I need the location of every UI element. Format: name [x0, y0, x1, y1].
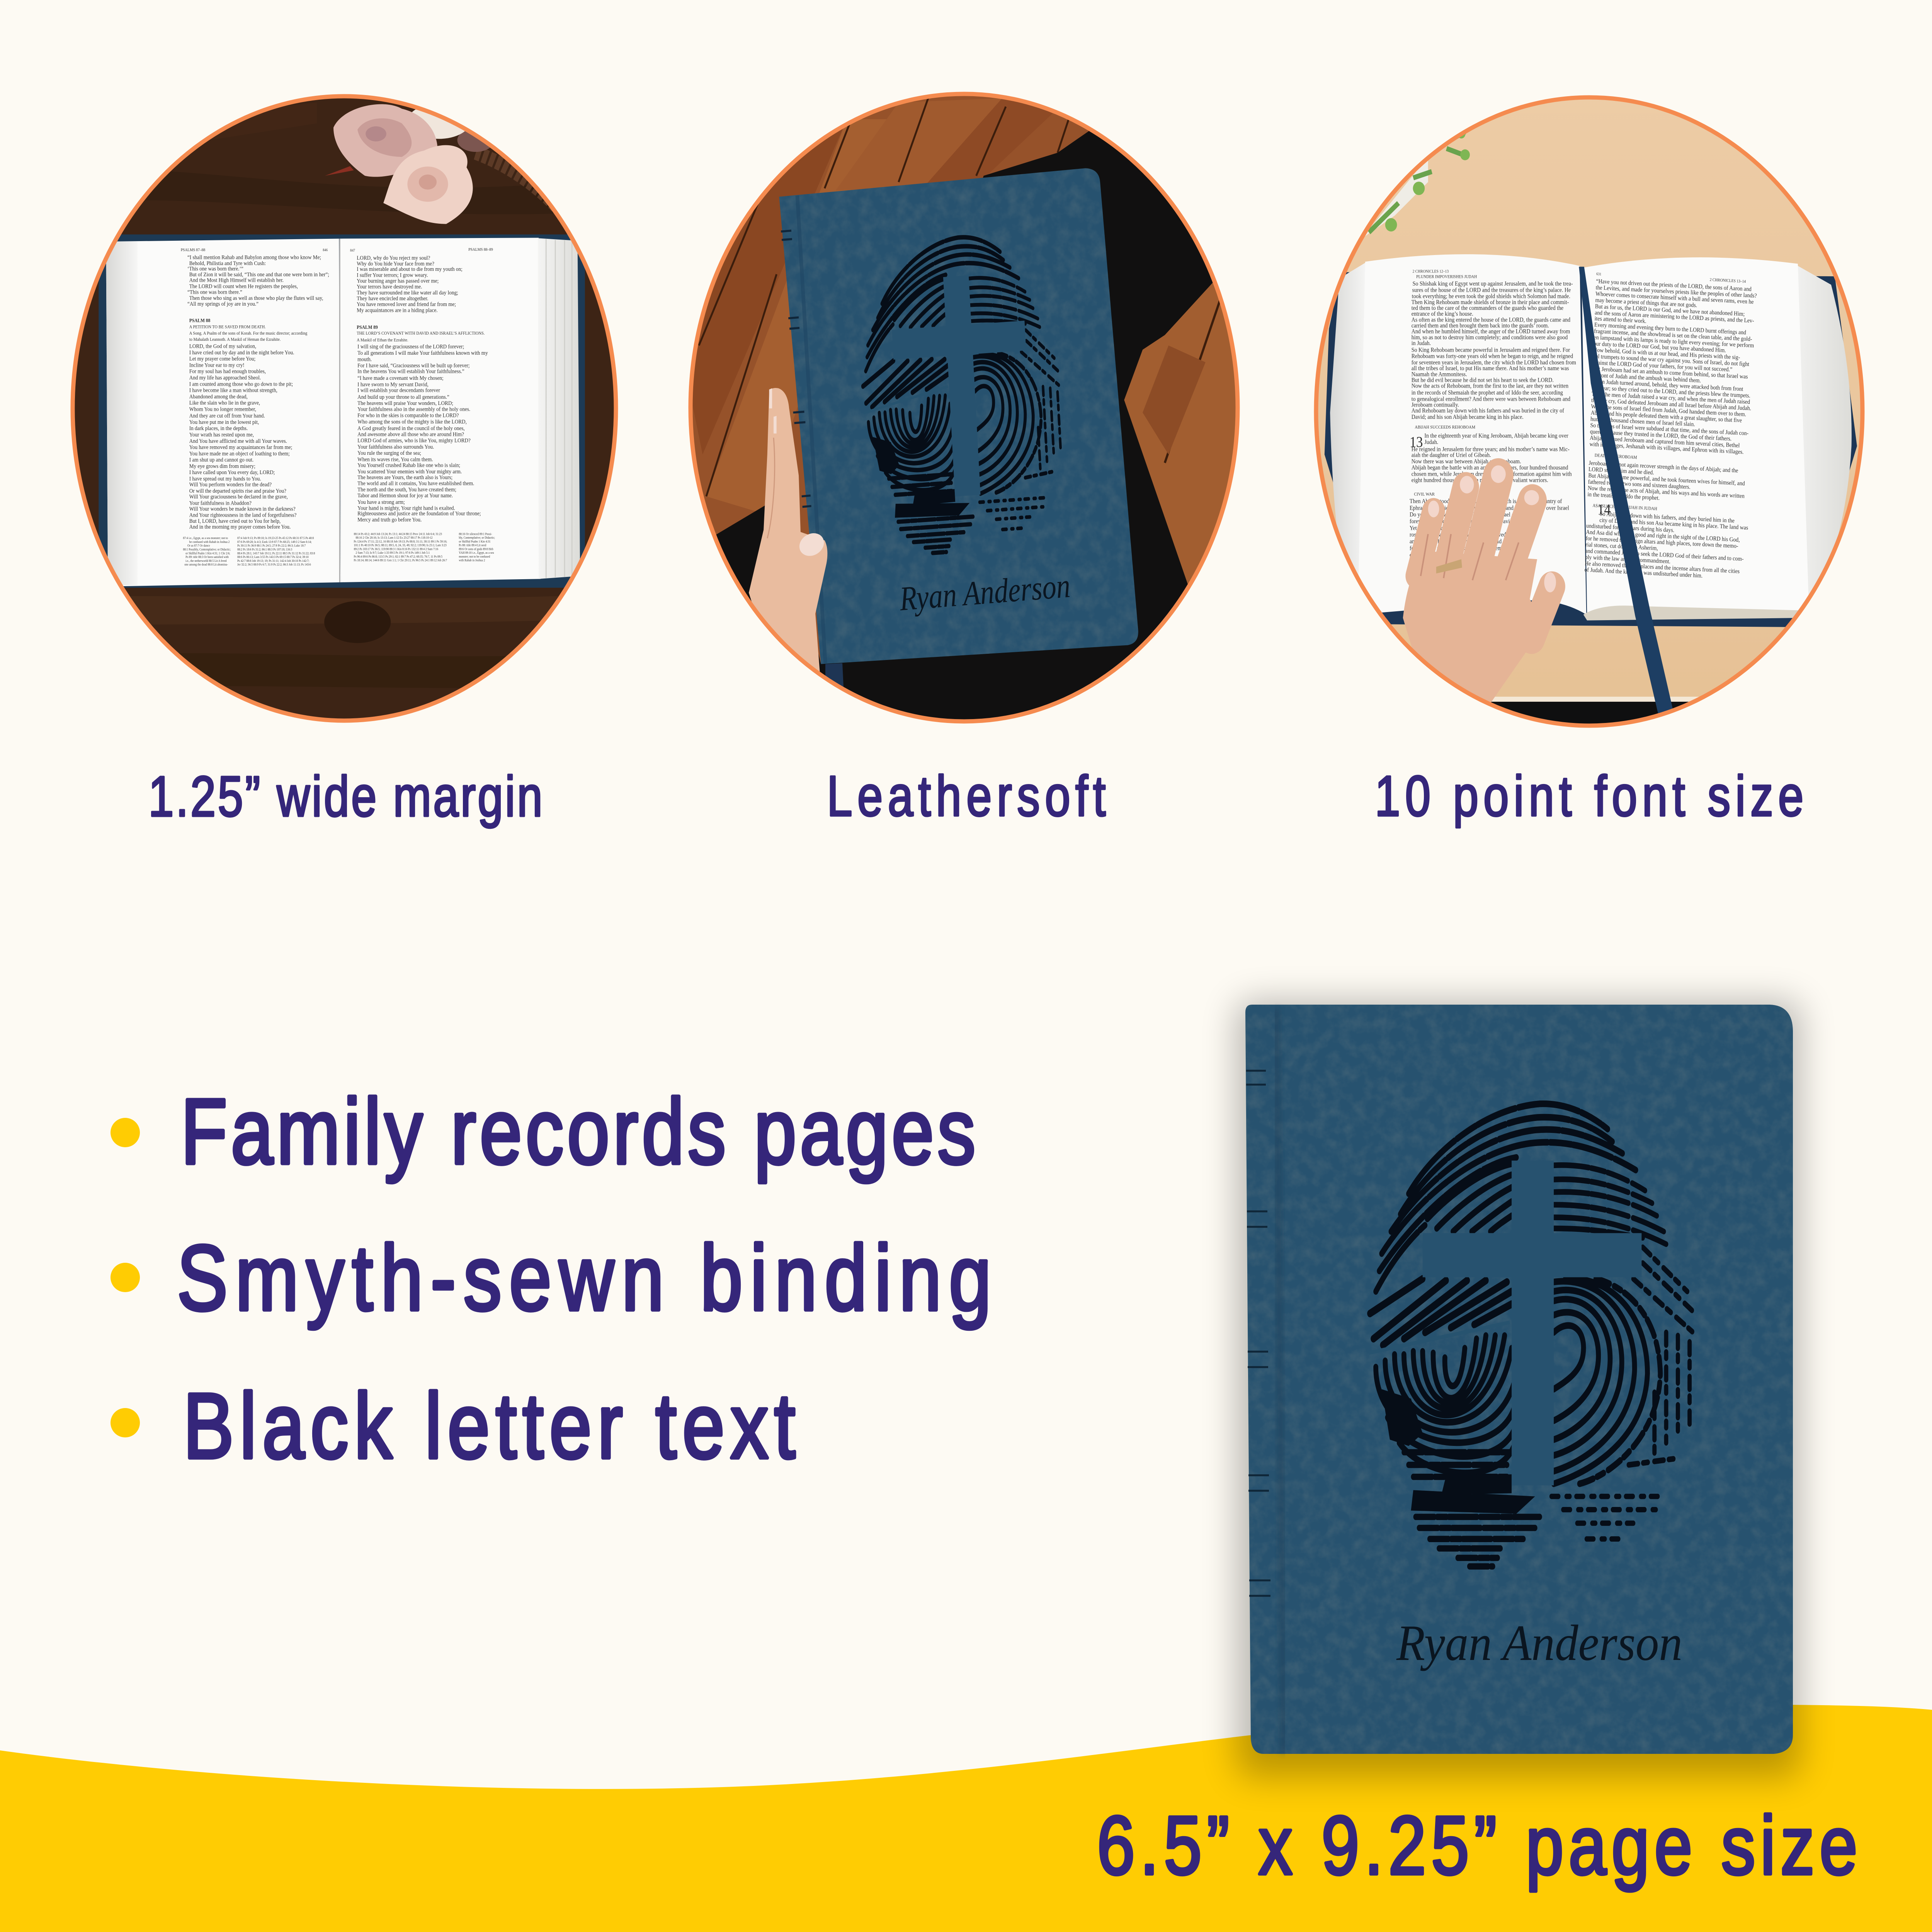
- right page text: rial stones, cut down the Asherim,: [1585, 541, 1658, 552]
- yellow wave band: [0, 1704, 1932, 1932]
- left page text: through the sons of David, and having with you: [1410, 558, 1513, 565]
- left page text: to genealogical enrollment? And there were wars between Rehoboam and: [1412, 396, 1571, 403]
- feature: family records: Family records pages: [181, 1079, 976, 1183]
- hand: [749, 388, 827, 677]
- left page text: As often as the king entered the house of the LORD, the guards came and: [1412, 317, 1571, 323]
- right page text: They have encircled me altogether.: [357, 295, 428, 302]
- right page text: The world and all it contains, You have established them.: [357, 480, 474, 487]
- left page text: Your wrath has rested upon me,: [189, 432, 254, 438]
- orange frame: [1316, 97, 1862, 726]
- left page text: Your faithfulness in Abaddon?: [189, 500, 252, 507]
- footnotes: Ps 96:4 89:6 Ps 86:8; 113:5 Ps 29:1; 82:1 89:7 Ps 47:2; 68:35; 76:7, 11 Ps 89:5: [354, 555, 442, 558]
- footnotes: Ps 42:7 88:8 Job 19:13; 19; Ps 31:11; 142:4 Job 30:10 Ps 142:7;: [237, 559, 309, 563]
- right page text: In the heavens You will establish Your faithfulness.”: [357, 368, 464, 375]
- left page text: I have called upon You every day, LORD;: [189, 469, 275, 476]
- right page text: Your hand is mighty, Your right hand is exalted.: [357, 505, 455, 512]
- right page text: ites attend to their work.: [1594, 315, 1646, 325]
- right page text: You rule the surging of the sea;: [357, 450, 421, 456]
- right page text: And build up your throne to all generations.”: [357, 394, 449, 400]
- footnotes: i.e., the netherworld 88:5 Lit A freed: [185, 559, 227, 563]
- hardcover book held in hand: [777, 165, 1143, 693]
- left page text: entrance of the king’s house.: [1412, 311, 1473, 317]
- feature: smyth-sewn: Smyth-sewn binding: [177, 1226, 991, 1330]
- right page text: DEATH OF JEROBOAM: [1595, 453, 1637, 460]
- feature list: [111, 1079, 991, 1478]
- footnotes: monster; not to be confused: [459, 555, 490, 558]
- left page text: Will Your graciousness be declared in the grave,: [189, 493, 288, 500]
- dark band under table: [1483, 701, 1713, 735]
- left page text: ‘This one was born there.’”: [187, 265, 243, 272]
- left page text: Or will the departed spirits rise and praise You?: [189, 488, 286, 494]
- hand on page: [1403, 465, 1556, 702]
- right page text: 847: [350, 248, 355, 252]
- left page text: I have become like a man without strength,: [189, 387, 277, 394]
- right page text: Your terrors have destroyed me.: [357, 284, 422, 290]
- page size label: 6.5” x 9.25” page size: [1097, 1799, 1857, 1892]
- footnotes: be confused with Rahab in Joshua 2: [189, 540, 230, 544]
- left page text: “I shall mention Rahab and Babylon among those who know Me;: [187, 254, 321, 261]
- right page text: But as for us, the LORD is our God, and we have not abandoned Him;: [1595, 303, 1745, 318]
- footnotes: 101:1 Ps 40:10 Ps 36:5; 88:11; 89:5, 8, 24, 33, 49; 92:2; 119:90; Is 25:1; Lam 3:23: [354, 543, 447, 547]
- left page text: But of Zion it will be said, “This one and that one were born in her”;: [189, 271, 329, 278]
- footnotes: Or as 87:7 Or dance: [187, 544, 210, 548]
- caption: leathersoft: Leathersoft: [827, 764, 1106, 828]
- left page text: And when he humbled himself, the anger of the LORD turned away from: [1412, 328, 1570, 335]
- right page text: 631: [1596, 272, 1602, 276]
- wood table: [75, 98, 614, 719]
- left page text: 2 CHRONICLES 12–13: [1413, 269, 1449, 274]
- left page text: I am shut up and cannot go out.: [189, 457, 253, 463]
- footnotes: 88:1 Possibly, Contemplative; or Didactic;: [183, 548, 231, 551]
- right page text: And awesome above all those who are around Him?: [357, 431, 464, 438]
- right page text: the Levites, and made for yourselves priests like the peoples of other lands?: [1596, 284, 1757, 299]
- left page text: He reigned in Jerusalem for three years; and his mother’s name was Mic-: [1412, 446, 1570, 453]
- right page text: A God greatly feared in the council of the holy ones,: [357, 425, 465, 432]
- right page text: So the sons of Israel were subdued at that time, and the sons of Judah con-: [1590, 422, 1749, 437]
- right page text: and the sons of Aaron are ministering to the LORD as priests, and the Lev-: [1595, 310, 1754, 324]
- footnotes: Ps 18:14; 88:14; 144:6 89:11 Gen 1:1; 1 Chr 29:11; Ps 96:5 Ps 24:1 89:12 Job 26:7: [354, 558, 447, 562]
- left page text: And Your righteousness in the land of forgetfulness?: [189, 512, 296, 519]
- right page text: LORD struck him and he died.: [1588, 466, 1654, 476]
- right page text: and rear; so they cried out to the LORD, and the priests blew the trumpets.: [1592, 384, 1750, 399]
- left page text: You have put me in the lowest pit,: [189, 419, 259, 425]
- left page text: Abijah began the battle with an army of warriors, four hundred thousand: [1412, 464, 1568, 471]
- footnotes: Jer 32:2; 36:5 88:9 Ps 6:7; 31:9 Ps 22:2; 86:3 Job 11:13; Ps 143:6: [237, 563, 311, 566]
- footnotes: 88:2 Ps 18:6 Ps 31:2; 86:1 88:3 Ps 107:18; 116:3: [237, 548, 292, 551]
- left page text: Now there was war between Abijah and Jeroboam.: [1412, 458, 1521, 465]
- right page text: mouth.: [357, 356, 372, 363]
- large chapter numbers: 14: [1597, 501, 1611, 518]
- right page text: Who among the sons of the mighty is like the LORD,: [357, 418, 467, 425]
- right page text: our duty to the LORD our God, but you have abandoned Him.: [1594, 340, 1726, 354]
- left page text: all the tribes of Israel, to put His name there. And his mother’s name was: [1412, 365, 1569, 372]
- left page text: Whom You no longer remember,: [189, 406, 256, 413]
- right page text: Why do You hide Your face from me?: [357, 260, 434, 267]
- footnotes: 89:2 Ps 103:17 Ps 36:5; 119:90 89:3 1 Kin 8:16 Ps 132:11 89:4 2 Sam 7:16: [354, 547, 438, 551]
- left page text: And Rehoboam lay down with his fathers and was buried in the city of: [1412, 408, 1564, 414]
- right page text: So Abijah lay down with his fathers, and they buried him in the: [1600, 511, 1735, 524]
- footnotes: 88:14 Ps 43:2; 44:9 Job 13:24; Ps 13:1; 44:24 88:15 Prov 24:11 Job 6:4; 31:23: [354, 532, 442, 536]
- right page text: PSALM 89: [357, 324, 378, 330]
- engraved name: Ryan Anderson: [1396, 1614, 1682, 1671]
- right page text: You Yourself crushed Rahab like one who is slain;: [357, 462, 460, 469]
- open bible with ribbon: [1325, 254, 1857, 627]
- right page text: The heavens are Yours, the earth also is Yours;: [357, 474, 452, 481]
- left page text: in the records of Shemaiah the prophet and of Iddo the seer, according: [1412, 389, 1563, 396]
- right page text: And Asa did what was good and right in the sight of the LORD his God,: [1586, 529, 1740, 543]
- right page text: The heavens will praise Your wonders, LORD;: [357, 400, 453, 406]
- right page text: ply with the law and the commandment.: [1585, 554, 1670, 565]
- right page text: with its villages, Jeshanah with its villages, and Ephron with its villages.: [1589, 441, 1744, 456]
- right page text: undisturbed for ten years during his days.: [1586, 523, 1675, 534]
- right page text: Now the rest of the acts of Abijah, and his ways and his words are written: [1588, 485, 1745, 500]
- left page text: ted them to the care of the commanders of the guards who guarded the: [1412, 305, 1564, 311]
- right page text: Your burning anger has passed over me;: [357, 278, 439, 284]
- left page text: to Mahalath Leannoth. A Maskil of Heman the Ezrahite.: [189, 337, 281, 342]
- right page text: My acquaintances are in a hiding place.: [357, 307, 438, 314]
- spine: [1246, 1009, 1284, 1752]
- left page text: rose up, and worthless men gathered, proved too strong: [1410, 532, 1529, 538]
- right page text: When its waves rise, You calm them.: [357, 456, 433, 463]
- caption: font size: 10 point font size: [1375, 764, 1804, 828]
- right page text: fathered twenty-two sons and sixteen daughters.: [1588, 479, 1690, 490]
- footnotes: or Skillful Psalm 1 Kin 4:31; 1 Chr 2:6;: [185, 551, 230, 555]
- left page text: Abandoned among the dead,: [189, 393, 248, 400]
- right page text: Jeroboam did not again recover strength in the days of Abijah; and the: [1588, 460, 1738, 474]
- right page text: Your faithfulness also surrounds You.: [357, 444, 434, 450]
- left page text: him, so as not to destroy him completely; and conditions were also good: [1412, 334, 1568, 341]
- left page text: I have spread out my hands to You.: [189, 476, 261, 482]
- leather cover: [1244, 1005, 1795, 1756]
- left page text: You have removed my acquaintances far from me;: [189, 444, 292, 451]
- right page text: For I have said, “Graciousness will be built up forever;: [357, 362, 470, 369]
- right page text: When Judah turned around, behold, they were attacked both from front: [1592, 378, 1743, 393]
- right page text: in front of Judah and the ambush was behind them.: [1592, 372, 1701, 384]
- right page text: They have surrounded me like water all day long;: [357, 289, 458, 296]
- left page text: for seventeen years in Jerusalem, the city which the LORD had chosen from: [1412, 359, 1576, 366]
- left page text: David; and his son Abijah became king in his place.: [1412, 414, 1524, 420]
- right page text: Then the men of Judah raised a war cry, and when the men of Judah raised: [1591, 391, 1750, 405]
- right page text: ASA SUCCEEDS ABIJAH IN JUDAH: [1592, 503, 1657, 512]
- footnotes: 88:16 Or silenced 89:1 Possi-: [459, 532, 492, 536]
- left page text: eight hundred thousand chosen men who were valiant warriors.: [1412, 477, 1548, 484]
- left page text: 846: [323, 248, 328, 252]
- right page text: Righteousness and justice are the foundation of Your throne;: [357, 510, 481, 517]
- orange frame: [690, 94, 1238, 721]
- left page text: And the Most High Himself will establish her.: [189, 277, 284, 284]
- footnotes: Ps 89: title 88:3 Or been satisfied with: [185, 555, 229, 559]
- left page text: CIVIL WAR: [1414, 492, 1435, 497]
- right page text: for he removed the foreign altars and high places, tore down the memo-: [1586, 535, 1738, 549]
- right page text: LORD, why do You reject my soul?: [357, 255, 430, 261]
- left page text: aiah the daughter of Uriel of Gibeah.: [1412, 452, 1491, 459]
- right page text: PSALMS 88–89: [468, 248, 493, 252]
- left page text: Like the slain who lie in the grave,: [189, 400, 260, 406]
- left page text: Do you not know that the LORD God of Israel gave the rule: [1410, 512, 1540, 518]
- panel: leathersoft photo: [680, 77, 1268, 735]
- right page text: and commanded Judah to seek the LORD God of their fathers and to com-: [1585, 548, 1744, 563]
- footnotes: 89:6 Or sons of gods 89:8 Heb: [459, 547, 493, 551]
- left page text: PSALMS 87–88: [181, 248, 205, 252]
- left page text: In the eighteenth year of King Jeroboam, Abijah became king over: [1424, 433, 1568, 439]
- left page text: Rehoboam was forty-one years old when he began to reign, and he reigned: [1412, 353, 1573, 360]
- left page text: Let my prayer come before You;: [189, 355, 255, 362]
- right page text: LORD God of armies, who is like You, mighty LORD?: [357, 437, 471, 444]
- right page text: He also removed the high places and the incense altars from all the cities: [1585, 560, 1740, 575]
- right page text: en lampstand with its lamps is ready to light every evening; for we perform: [1594, 334, 1754, 349]
- left page text: LORD, the God of my salvation,: [189, 343, 256, 350]
- right page text: I was miserable and about to die from my youth on;: [357, 266, 463, 272]
- left page text: forever to David and his sons? the son of David,: [1410, 518, 1514, 525]
- left page text: Now the acts of Rehoboam, from the first to the last, are they not written: [1412, 383, 1569, 389]
- left page text: Then those who sing as well as those who play the flutes will say,: [189, 295, 323, 301]
- right page text: Now behold, God is with us at our head, and His priests with the sig-: [1593, 347, 1740, 361]
- left page text: sures of the house of the LORD and the treasures of the king’s palace. He: [1412, 287, 1571, 294]
- left page text: Naamah the Ammonitess.: [1412, 371, 1467, 378]
- right page text: For who in the skies is comparable to the LORD?: [357, 412, 459, 419]
- left page text: PLUNDER IMPOVERISHES JUDAH: [1416, 274, 1477, 279]
- right page text: may become a priest of things that are not gods.: [1595, 297, 1697, 309]
- right page text: Whoever comes to consecrate himself with a bull and seven rams, even he: [1595, 291, 1754, 305]
- footnotes: Ps 30:11 Ps 36:9 88:1 Ps 24:5; 27:9 Ps 22:2; 86:3; Luke 18:7: [237, 544, 306, 548]
- right page text: fragrant incense, and the showbread is set on the clean table, and the gold-: [1594, 328, 1752, 343]
- wood floor: [680, 77, 1268, 735]
- left page text: Judah.: [1424, 439, 1438, 446]
- left page text: ABIJAH SUCCEEDS REHOBOAM: [1415, 425, 1475, 430]
- right page text: I suffer Your terrors; I grow weary.: [357, 272, 428, 279]
- right page text: in the treatise of Iddo the prophet.: [1587, 491, 1660, 502]
- bullet 2: [111, 1263, 140, 1292]
- footnotes: with Rahab in Joshua 2: [459, 558, 485, 562]
- left page text: Will Your wonders be made known in the darkness?: [189, 506, 296, 512]
- left page text: for he could not hold his own against them.: [1410, 545, 1503, 552]
- right page text: Your faithfulness also in the assembly of the holy ones.: [357, 406, 470, 413]
- light wood table: [1306, 77, 1886, 735]
- right page text: I have sworn to My servant David,: [357, 381, 429, 388]
- left page text: You have made me an object of loathing to them;: [189, 451, 290, 457]
- book shadow: [1236, 1001, 1801, 1777]
- footnotes: bly, Contemplative; or Didactic;: [459, 536, 495, 539]
- right page text: city of David, and his son Asa became king in his place. The land was: [1599, 517, 1748, 531]
- left page text: Then King Rehoboam made shields of bronze in their place and commit-: [1412, 299, 1569, 306]
- fingerprint cross emblem: [1369, 1104, 1697, 1566]
- footnotes: 87:4 i.e., Egypt, as a sea monster; not to: [183, 536, 228, 540]
- left page text: chosen men, while Jeroboam drew up in battle formation against him with: [1412, 471, 1572, 478]
- left page text: A PETITION TO BE SAVED FROM DEATH.: [189, 325, 266, 330]
- right page text: Abijah pursued Jeroboam and captured from him several cities, Bethel: [1590, 435, 1740, 449]
- right page text: hundred thousand chosen men of Israel fell slain.: [1590, 416, 1695, 428]
- left page text: Ephraim, and said, “Listen to me, Jeroboam and all Israel: rule over Israel: [1410, 505, 1569, 512]
- left page text: and when Rehoboam was young and timid and: [1410, 538, 1511, 545]
- large chapter numbers: 13: [1410, 434, 1423, 450]
- hero book: [1236, 1001, 1801, 1777]
- left page text: PSALM 88: [189, 318, 210, 323]
- right page text: You have removed lover and friend far from me;: [357, 301, 456, 308]
- left page text: And they are cut off from Your hand.: [189, 413, 265, 419]
- plant: [1362, 129, 1470, 239]
- left page text: In dark places, in the depths.: [189, 425, 248, 432]
- ribbon bookmark: [1579, 267, 1673, 713]
- open book: [99, 235, 585, 588]
- right page text: quered because they trusted in the LORD, the God of their fathers.: [1590, 429, 1732, 442]
- caption: wide margin: 1.25” wide margin: [148, 765, 543, 828]
- left page text: But I, LORD, have cried out to You for help,: [189, 518, 281, 524]
- right page text: Abijah and his people defeated them with a great slaughter, so that five: [1591, 410, 1742, 424]
- engraved name: Ryan Anderson: [898, 566, 1071, 618]
- right page text: To all generations I will make Your faithfulness known with my: [357, 350, 488, 356]
- panel: wide margin photo: [58, 77, 638, 735]
- left page text: But he did evil because he did not set his heart to seek the LORD.: [1412, 377, 1554, 384]
- black trousers: [710, 130, 1253, 735]
- right page text: against the LORD God of your fathers, for you will not succeed.”: [1593, 359, 1732, 373]
- left page text: I am counted among those who go down to the pit;: [189, 381, 293, 388]
- left page text: And in the morning my prayer comes before You.: [189, 524, 291, 530]
- left page text: My eye grows dim from misery;: [189, 463, 255, 469]
- right page text: “Have you not driven out the priests of the LORD, the sons of Aaron and: [1596, 278, 1752, 293]
- feature: black letter: Black letter text: [183, 1374, 795, 1478]
- left page text: A Song. A Psalm of the sons of Korah. For the music director; according: [189, 331, 308, 336]
- right page text: Mercy and truth go before You.: [357, 517, 422, 523]
- left page text: “All my springs of joy are in you.”: [187, 301, 259, 307]
- left page text: took everything; he even took the gold shields which Solomon had made.: [1412, 293, 1570, 300]
- footnotes: Ps 124:4 Ps 17:11; 22:12, 16 88:18 Job 19:13; Ps 88:8; 31:11; 38:11 89:1 Ps 59:16;: [354, 539, 447, 543]
- left page text: And my life has approached Sheol.: [189, 374, 261, 381]
- right page text: of Judah. And the kingdom was undisturbed under him.: [1584, 566, 1703, 579]
- left page text: I have cried out by day and in the night before You.: [189, 349, 294, 356]
- fingerprint cross emblem: [855, 231, 1070, 557]
- left page text: Yet Jeroboam rebelled against his master,: [1410, 525, 1499, 532]
- left page text: And You have afflicted me with all Your waves.: [189, 438, 287, 444]
- right page text: You scattered Your enemies with Your mighty arm.: [357, 468, 462, 475]
- footnotes: 88:4 Ps 28:1; 143:7 Job 19:11; Ps 22:11 88:5 Ps 31:12 Ps 31:22; 83:8: [237, 551, 315, 555]
- left page text: Behold, Philistia and Tyre with Cush:: [189, 260, 266, 267]
- right page text: The north and the south, You have created them;: [357, 486, 456, 493]
- orange frame: [73, 96, 616, 721]
- right page text: A Maskil of Ethan the Ezrahite.: [357, 338, 408, 342]
- right page text: But Abijah became powerful, and he took fourteen wives for himself, and: [1588, 473, 1745, 487]
- footnotes: 87:6 Ps 69:28; Is 4:3; Ezek 13:9 87:7 Ps 68:25; 149:3 2 Sam 6:14;: [237, 540, 312, 544]
- left page text: carried them and then brought them back into the guards’ room.: [1412, 323, 1549, 329]
- right page text: “I have made a covenant with My chosen;: [357, 375, 444, 381]
- left page text: Jeroboam continually.: [1412, 402, 1459, 408]
- footnotes: 87:4 Job 9:13; Ps 89:10; Is 19:23-25 Ps 45:12 Ps 68:31 87:5 Ps 48:8: [237, 536, 314, 540]
- footnotes: 88:6 Ps 86:13; Lam 3:55 Ps 143:3 Ps 69:15 88:7 Ps 32:4; 39:10: [237, 555, 309, 559]
- left page text: in Judah.: [1412, 340, 1431, 347]
- right page text: When the sons of Israel fled from Judah, God handed them over to them.: [1591, 403, 1746, 418]
- right page text: the war cry, God defeated Jeroboam and all Israel before Abijah and Judah.: [1591, 397, 1751, 412]
- right page text: Every morning and evening they burn to the LORD burnt offerings and: [1594, 321, 1747, 336]
- right page text: 2 CHRONICLES 13–14: [1710, 278, 1746, 284]
- left page text: Then Abijah stood on Mount Zemaraim, which is in the hill country of: [1410, 498, 1562, 505]
- left page text: “This one was born there.”: [187, 289, 242, 296]
- right page text: I will establish your descendants forever: [357, 387, 440, 394]
- left page text: the golden calves which Jeroboam made for gods.: [1410, 565, 1517, 572]
- left page text: So Shishak king of Egypt went up against Jerusalem, and he took the trea-: [1413, 281, 1573, 287]
- footnotes: or Skillful Psalm 1 Kin 4:31: [459, 539, 491, 543]
- left page text: So King Rehoboam became powerful in Jerusalem and reigned there. For: [1412, 347, 1570, 354]
- left page text: Will You perform wonders for the dead?: [189, 481, 272, 488]
- footnotes: 88:16 2 Chr 28:16; Is 13:13; Lam 1:12 Ex 23:27 88:17 Ps 118:10-12: [355, 536, 433, 539]
- right page text: THE LORD’S COVENANT WITH DAVID AND ISRAEL’S AFFLICTIONS.: [357, 331, 485, 336]
- footnotes: Ps 88: title 89:4 Lit seed: [459, 543, 486, 547]
- footnotes: 2 Sam 7:13; Is 9:7; Luke 1:33 89:5 Ps 19:1; 97:6 Ps 149:1 Job 5:1: [355, 551, 430, 554]
- bullet 1: [111, 1118, 140, 1147]
- footnotes: one among the dead 88:8 Lit abomina-: [184, 563, 228, 566]
- panel: font size photo: [1306, 77, 1886, 735]
- flowers: [325, 104, 561, 224]
- footnotes: YAH 89:10 i.e., Egypt, as a sea: [459, 551, 494, 554]
- bullet 3: [111, 1408, 140, 1437]
- left page text: The LORD will count when He registers the peoples,: [189, 283, 298, 290]
- right page text: But Jeroboam had set an ambush to come from behind, so that Israel was: [1592, 366, 1748, 380]
- left page text: could resist the kingdom of the LORD: [1410, 552, 1493, 558]
- left page text: Incline Your ear to my cry!: [189, 362, 245, 369]
- right page text: Tabor and Hermon shout for joy at Your name.: [357, 492, 453, 499]
- left page text: For my soul has had enough troubles,: [189, 368, 266, 375]
- right page text: nal trumpets to sound the war cry against you. Sons of Israel, do not fight: [1593, 353, 1749, 368]
- right page text: You have a strong arm;: [357, 499, 405, 505]
- right page text: I will sing of the graciousness of the LORD forever;: [357, 344, 464, 350]
